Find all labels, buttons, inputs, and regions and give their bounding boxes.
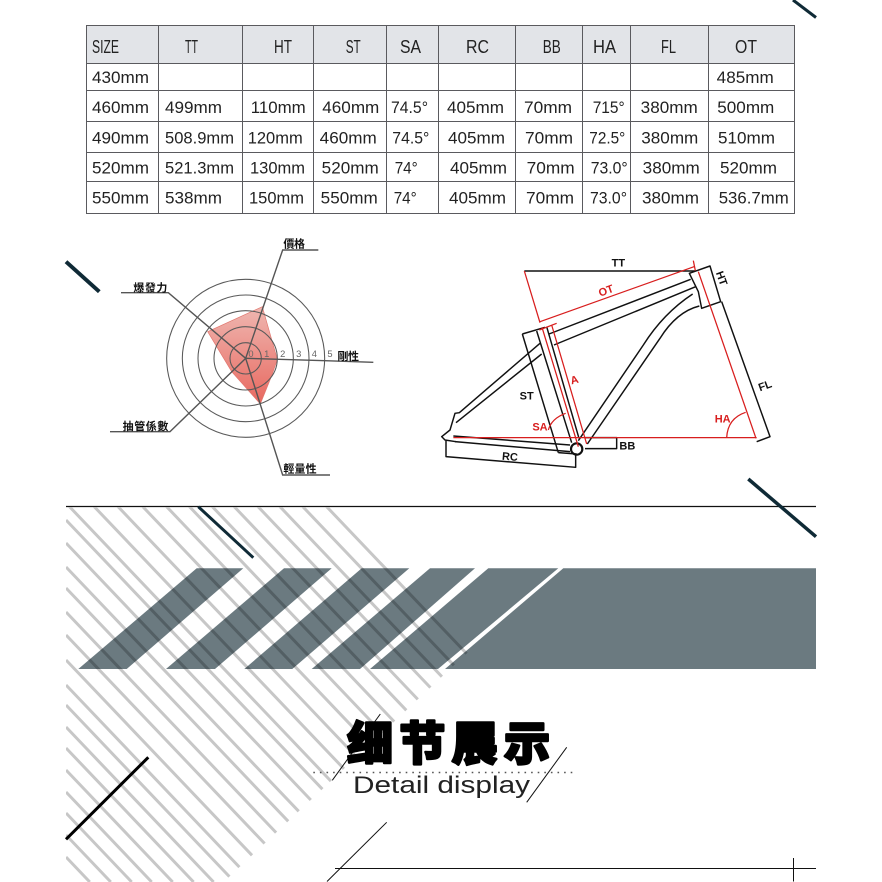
radar scale digits: [248, 349, 333, 359]
diagonal stripe background: [66, 508, 468, 882]
decorative slash: over stripes top: [198, 507, 253, 558]
row 520mm: 520mm: [720, 158, 777, 177]
row 490mm: 72.5°: [589, 128, 625, 147]
heading English subtitle: Detail display: [353, 772, 530, 799]
row 460mm: [92, 98, 774, 117]
row 520mm: 520mm: [322, 158, 379, 177]
row 490mm: 460mm: [320, 128, 377, 147]
table header row: SIZE: [92, 37, 119, 57]
row 460mm: 405mm: [447, 98, 504, 117]
row 520mm: 130mm: [250, 158, 305, 177]
radar rings: [167, 279, 325, 437]
table header row: OT: [735, 37, 757, 57]
row 490mm: 70mm: [525, 128, 573, 147]
radar axes and leader lines: [110, 250, 373, 475]
row 430mm: [92, 68, 774, 87]
table header row: TT: [185, 37, 198, 57]
row 430mm: 430mm: [92, 68, 149, 87]
radar label: stiffness: 剛性: [337, 349, 359, 363]
radar chart: [110, 237, 373, 476]
frame labels in red: [532, 283, 731, 433]
radar label: price: 價格: [283, 237, 305, 251]
decorative slash: black lower left: [66, 757, 148, 839]
radar scale digits: 3: [296, 349, 301, 359]
radar scale digits: 0: [248, 349, 254, 359]
frame labels in red: HA: [715, 414, 731, 426]
radar scale digits: 2: [280, 349, 285, 359]
heading thin slash right: [527, 747, 567, 802]
bike frame geometry diagram: [442, 258, 774, 467]
row 550mm: 73.0°: [590, 188, 627, 207]
row 520mm: 521.3mm: [165, 158, 234, 177]
slanted grey banner bars: [78, 568, 816, 669]
frame labels in red: SA: [532, 421, 548, 433]
frame labels in black: FL: [757, 378, 774, 394]
row 490mm: 508.9mm: [165, 128, 234, 147]
row 550mm: 380mm: [642, 188, 699, 207]
frame labels in black: [502, 258, 774, 464]
table header row: HT: [274, 37, 292, 57]
row 550mm: 70mm: [526, 188, 574, 207]
table header row: HA: [593, 37, 616, 57]
top rule of detail section: [66, 506, 816, 508]
geometry table: [86, 26, 794, 214]
radar value polygon: [208, 307, 277, 404]
frame labels in black: ST: [520, 390, 534, 402]
row 550mm: 74°: [394, 188, 417, 207]
row 550mm: 150mm: [249, 188, 304, 207]
row 490mm: [92, 128, 775, 147]
decorative slash: left of radar: [66, 262, 99, 292]
bottom corner lines: [327, 822, 816, 882]
row 550mm: 550mm: [92, 188, 149, 207]
frame labels in red: OT: [597, 283, 616, 300]
heading Chinese title: 细节展示: [347, 718, 550, 770]
heading dotted rule: [313, 772, 576, 774]
table header row: FL: [661, 37, 676, 57]
row 490mm: 510mm: [718, 128, 775, 147]
decorative slash: right of rule: [748, 479, 816, 537]
frame labels in black: HT: [713, 270, 729, 288]
row 430mm: 485mm: [717, 68, 774, 87]
row 490mm: 74.5°: [392, 128, 429, 147]
row 520mm: 380mm: [643, 158, 700, 177]
table header row: RC: [466, 37, 489, 57]
row 550mm: 536.7mm: [719, 188, 789, 207]
table header row: [86, 26, 794, 64]
frame labels in black: BB: [619, 440, 635, 452]
radar label: tube coefficient: 抽管係數: [123, 419, 168, 433]
table header row: ST: [346, 37, 361, 57]
heading thin slash left: [332, 714, 380, 780]
row 460mm: 110mm: [251, 98, 306, 117]
table grid: [86, 26, 794, 214]
row 490mm: 120mm: [248, 128, 303, 147]
radar label: explosive power: 爆發力: [133, 280, 167, 294]
frame labels in black: TT: [612, 258, 625, 270]
radar scale digits: 4: [312, 349, 317, 359]
row 550mm: 538mm: [165, 188, 222, 207]
row 520mm: [92, 158, 777, 177]
radar scale digits: 5: [327, 349, 333, 359]
row 520mm: 73.0°: [591, 158, 628, 177]
frame tubes in black: [442, 266, 770, 467]
row 520mm: 520mm: [92, 158, 149, 177]
row 460mm: 460mm: [92, 98, 149, 117]
row 520mm: 70mm: [527, 158, 575, 177]
radar scale digits: 1: [264, 349, 269, 359]
frame labels in red: A: [569, 374, 580, 387]
row 460mm: 380mm: [641, 98, 698, 117]
row 520mm: 74°: [395, 158, 418, 177]
bottom bracket circle: [571, 443, 582, 455]
row 490mm: 490mm: [92, 128, 149, 147]
decorative slash: top right: [793, 0, 816, 18]
row 460mm: 70mm: [524, 98, 572, 117]
table header row: SA: [400, 37, 421, 57]
radar label: lightness: 輕量性: [283, 462, 317, 476]
red measurement lines: [453, 261, 757, 447]
row 550mm: 550mm: [321, 188, 378, 207]
row 460mm: 715°: [593, 98, 625, 117]
row 550mm: 405mm: [449, 188, 506, 207]
row 520mm: 405mm: [450, 158, 507, 177]
row 490mm: 405mm: [448, 128, 505, 147]
frame labels in black: RC: [502, 451, 518, 464]
row 460mm: 499mm: [165, 98, 222, 117]
row 460mm: 74.5°: [391, 98, 428, 117]
row 460mm: 460mm: [322, 98, 379, 117]
row 460mm: 500mm: [717, 98, 774, 117]
section heading: [313, 714, 576, 802]
table header row: BB: [543, 37, 561, 57]
row 490mm: 380mm: [641, 128, 698, 147]
row 550mm: [92, 188, 789, 207]
